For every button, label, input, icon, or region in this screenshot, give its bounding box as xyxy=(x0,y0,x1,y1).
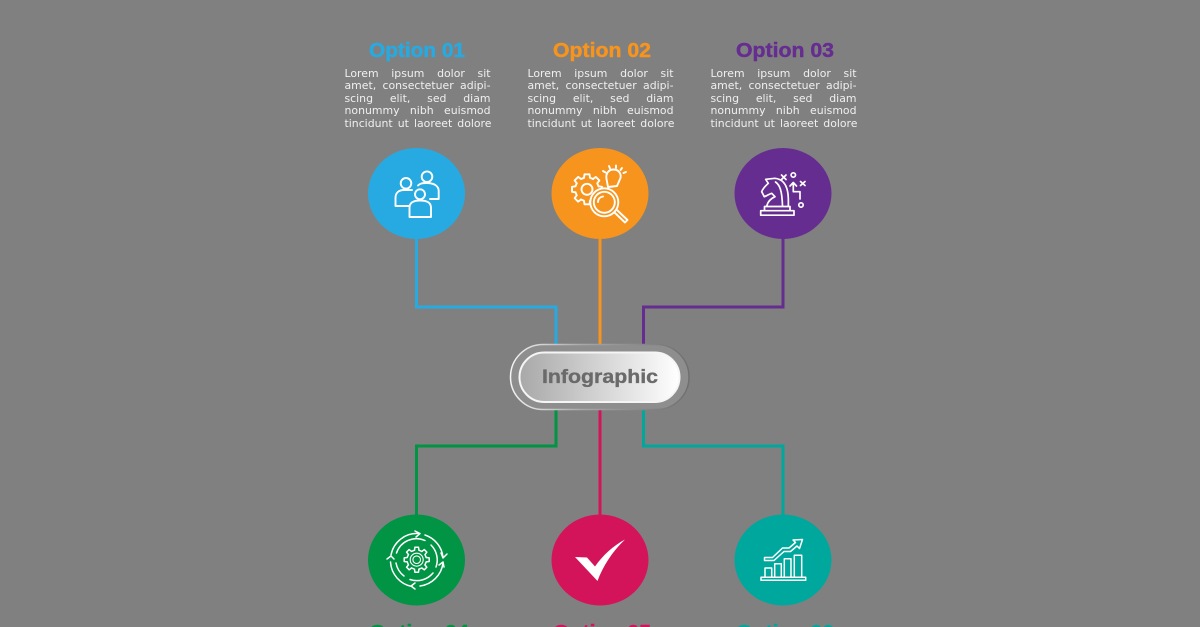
circle: option 04 xyxy=(368,514,465,606)
text block: option 03: scing elit, sed diam xyxy=(710,92,856,105)
text block: option 03: nonummy nibh euismod xyxy=(710,104,856,117)
text block: option 02: tincidunt ut laoreet dolore xyxy=(528,117,674,130)
text block: option 02: nonummy nibh euismod xyxy=(528,104,674,117)
circle: option 01 xyxy=(368,148,465,239)
connector: option 02 xyxy=(598,238,602,345)
circle: option 03 xyxy=(734,148,832,239)
text block: option 01: nonummy nibh euismod xyxy=(344,104,490,117)
text block: option 02 xyxy=(528,66,674,130)
pill outer ring xyxy=(510,344,689,410)
icon: chess knight strategy xyxy=(761,173,805,215)
text block: option 03: amet, consectetuer adipi- xyxy=(710,79,856,92)
circle: option 02 xyxy=(552,148,648,239)
circle: option 06 xyxy=(734,514,832,606)
text block: option 01: scing elit, sed diam xyxy=(344,92,490,105)
text block: option 01 xyxy=(344,66,492,130)
circle: option 05 xyxy=(552,514,648,606)
connector: option 04 xyxy=(416,409,556,516)
text block: option 03: tincidunt ut laoreet dolore xyxy=(710,117,858,130)
heading: option 03: Option 03 xyxy=(736,40,834,62)
text block: option 03: Lorem ipsum dolor sit xyxy=(710,66,856,80)
icon: rising bar chart xyxy=(761,540,806,580)
text block: option 01: Lorem ipsum dolor sit xyxy=(344,66,490,80)
connector: option 05 xyxy=(598,409,602,516)
text block: option 01: tincidunt ut laoreet dolore xyxy=(344,117,492,130)
center pill badge xyxy=(510,344,689,410)
text block: option 02: amet, consectetuer adipi- xyxy=(528,79,674,92)
heading: option 02: Option 02 xyxy=(553,40,651,62)
icon: people group xyxy=(396,171,439,217)
pill inner face xyxy=(520,352,680,402)
text block: option 03 xyxy=(710,66,858,130)
icon: gear, magnifier and bulb xyxy=(572,166,628,222)
text block: option 01: amet, consectetuer adipi- xyxy=(344,79,490,92)
icon: check mark xyxy=(575,540,625,581)
icon: gear cycle xyxy=(387,531,447,589)
heading: option 01: Option 01 xyxy=(369,40,465,62)
connector: option 03 xyxy=(644,238,783,345)
connector: option 01 xyxy=(416,238,556,345)
text block: option 02: Lorem ipsum dolor sit xyxy=(528,66,674,80)
text block: option 02: scing elit, sed diam xyxy=(528,92,674,105)
pill label: Infographic xyxy=(542,366,658,388)
connector: option 06 xyxy=(644,409,783,516)
